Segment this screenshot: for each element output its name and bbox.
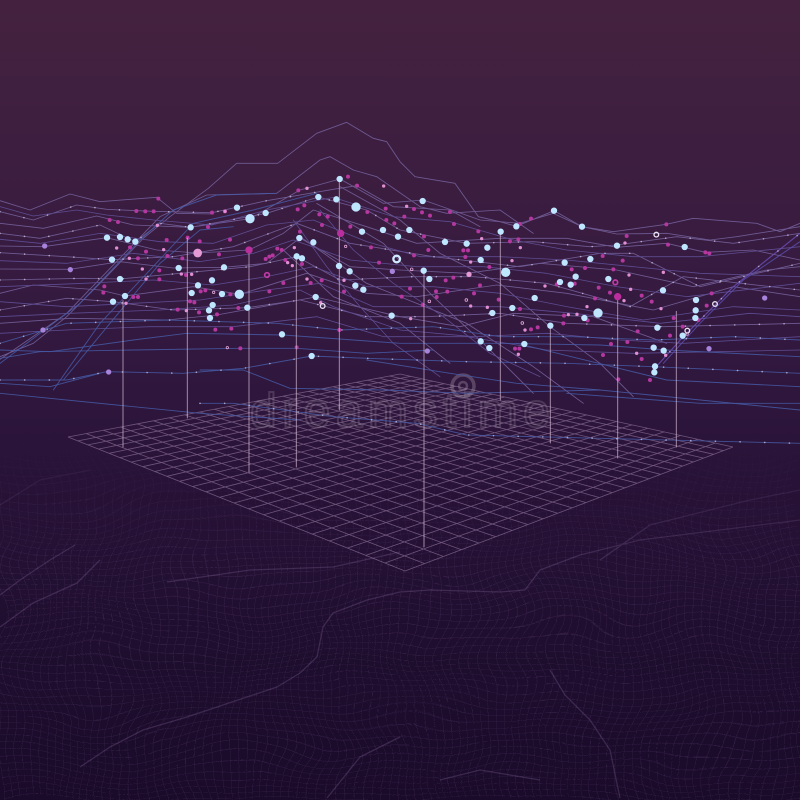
stems (123, 179, 676, 547)
ring nodes (212, 232, 717, 349)
extra wave lines filling the band (0, 197, 800, 377)
data network (coordinates at 3x) (0, 122, 800, 547)
small white nodes along lines (0, 189, 800, 443)
perspective floor grid (68, 374, 733, 571)
wave lines: upper purple (0, 122, 800, 403)
small pink nodes (117, 186, 666, 355)
small magenta nodes (103, 177, 712, 380)
large magenta and pink nodes (193, 230, 621, 300)
watermark: dreamstime (250, 385, 550, 438)
light blue nodes (107, 179, 696, 372)
wave lines: lower blue (0, 193, 800, 443)
lilac nodes (43, 246, 765, 372)
wireframe terrain mesh (0, 470, 800, 800)
large light blue nodes (239, 207, 598, 313)
